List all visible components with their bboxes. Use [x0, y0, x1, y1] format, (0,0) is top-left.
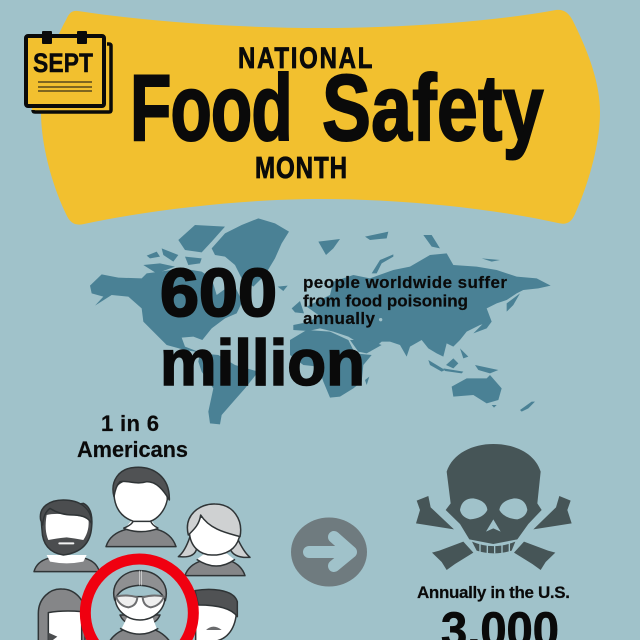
- label: annually in the u.s.: Annually in the U.S.: [417, 583, 570, 602]
- label: 1 in 6 americans: 1 in 6: [101, 411, 159, 436]
- calendar label: SEPT: [33, 48, 93, 78]
- stat description: from food poisoning: [303, 292, 468, 310]
- stat description: people worldwide suffer: [303, 273, 507, 292]
- number: million: million: [160, 326, 365, 399]
- people group: [34, 467, 250, 640]
- stat description: annually: [303, 309, 376, 328]
- label: 1 in 6 americans: [77, 411, 188, 462]
- person: woman with glasses: [109, 571, 170, 640]
- heading: month: MONTH: [255, 150, 347, 185]
- arrow icon: [291, 518, 367, 586]
- stat description: [303, 273, 507, 328]
- heading: national: NATIONAL: [238, 40, 372, 75]
- icon: september calendar: [26, 31, 112, 113]
- person: girl with pigtails: [178, 504, 250, 576]
- heading: safety: Safety: [322, 55, 544, 160]
- title banner: [41, 10, 600, 225]
- person: bearded man: [34, 500, 99, 572]
- number: 600: 600: [160, 255, 277, 331]
- person: top man: [106, 467, 176, 547]
- person: woman with long hair: [38, 589, 85, 640]
- stat: 600 million: [160, 255, 365, 399]
- icon: skull and crossbones: [416, 444, 572, 570]
- heading: food: Food: [130, 56, 293, 161]
- red highlight circle: [85, 559, 193, 640]
- person: man with mustache: [195, 589, 237, 640]
- world map: [90, 218, 551, 424]
- label: 1 in 6 americans: Americans: [77, 437, 188, 462]
